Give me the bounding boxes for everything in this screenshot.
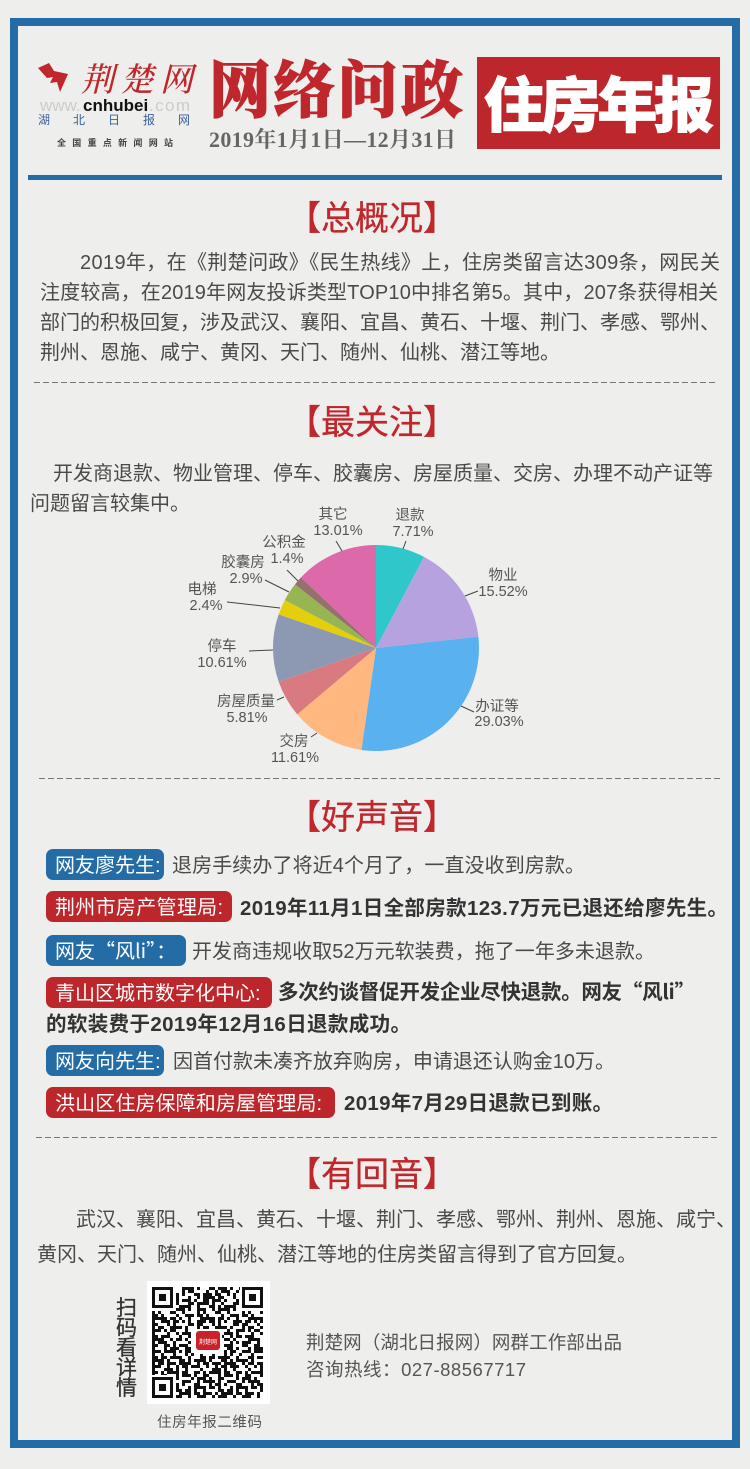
heading: 【总概况】	[287, 200, 457, 238]
pie labels	[188, 505, 528, 766]
text block: 黄冈、天门、随州、仙桃、潜江等地的住房类留言得到了官方回复。	[37, 1243, 637, 1266]
QR caption: 住房年报二维码	[157, 1414, 262, 1431]
pie labels: 2.4%	[189, 598, 223, 614]
text block: 部门的积极回复，涉及武汉、襄阳、宜昌、黄石、十堰、荆门、孝感、鄂州、	[40, 311, 720, 334]
logo newspaper name: 湖北日报网	[38, 112, 190, 127]
logo url: cnhubei	[83, 96, 148, 115]
heading: 【有回音】	[287, 1156, 457, 1194]
exchange 3 question	[46, 1045, 615, 1076]
exchange 1 reply	[46, 891, 728, 922]
pie labels: 29.03%	[474, 714, 524, 730]
text block: 开发商退款、物业管理、停车、胶囊房、房屋质量、交房、办理不动产证等	[53, 462, 713, 485]
pie labels: 1.4%	[270, 551, 304, 567]
heading: 【好声音】	[287, 799, 457, 837]
header rule	[28, 175, 722, 180]
logo url	[39, 96, 190, 115]
exchange 3 question: 网友向先生:	[55, 1050, 161, 1073]
footer credits: 荆楚网（湖北日报网）网群工作部出品	[306, 1332, 622, 1353]
scan prompt: 看	[116, 1337, 137, 1360]
exchange 1 question: 网友廖先生:	[55, 854, 161, 877]
pie labels: 11.61%	[271, 750, 319, 766]
section: overview	[40, 200, 720, 364]
pie labels: 停车	[208, 638, 236, 655]
exchange 2 question	[46, 935, 655, 966]
footer credits	[306, 1332, 622, 1380]
title: 网络问政	[209, 58, 463, 126]
scan prompt: 详	[116, 1357, 137, 1380]
scan prompt	[116, 1297, 137, 1400]
logo: cnhubei	[38, 63, 198, 148]
exchange 2 reply: 多次约谈督促开发企业尽快退款。网友“风li”	[278, 975, 695, 1005]
pie labels: 13.01%	[313, 523, 363, 539]
exchange 2 reply	[46, 975, 695, 1036]
scan prompt: 码	[116, 1317, 137, 1340]
pie labels: 办证等	[475, 697, 519, 715]
badge: annual report: 住房年报	[484, 73, 714, 140]
pie labels: 房屋质量	[217, 693, 275, 710]
footer credits: 咨询热线：027-88567717	[306, 1359, 526, 1380]
pie labels: 退款	[396, 507, 425, 524]
pie labels: 15.52%	[478, 584, 528, 600]
exchange 3 question: 因首付款未凑齐放弃购房，申请退还认购金10万。	[173, 1050, 615, 1073]
pie labels: 交房	[280, 732, 308, 750]
header	[38, 57, 720, 152]
text block: 问题留言较集中。	[30, 492, 190, 515]
pie labels: 物业	[488, 567, 518, 584]
text block	[37, 1208, 736, 1266]
pie labels: 电梯	[188, 581, 216, 598]
exchange 1 reply: 荆州市房产管理局:	[55, 896, 223, 919]
icon: logo mark	[38, 63, 68, 92]
pie labels: 7.71%	[392, 524, 434, 540]
badge: annual report	[477, 57, 720, 149]
scan prompt: 情	[116, 1377, 137, 1400]
text block	[30, 462, 713, 515]
exchange 1 question	[46, 849, 585, 880]
exchange 3 reply	[46, 1087, 613, 1118]
exchange 2 question: 网友“风li”：	[55, 935, 176, 964]
logo slogan: 全国重点新闻网站	[57, 137, 173, 148]
text block: 武汉、襄阳、宜昌、黄石、十堰、荆门、孝感、鄂州、荆州、恩施、咸宁、	[76, 1208, 736, 1231]
pie labels: 公积金	[262, 534, 306, 551]
exchange 1 question: 退房手续办了将近4个月了，一直没收到房款。	[172, 854, 585, 877]
leader lines	[227, 541, 478, 737]
pie labels: 10.61%	[197, 655, 247, 671]
scan prompt: 扫	[116, 1297, 137, 1320]
logo name: 荆楚网	[81, 63, 198, 99]
logo url: www.	[39, 96, 81, 115]
exchange 2 reply: 青山区城市数字化中心:	[55, 982, 261, 1005]
logo url: .com	[149, 96, 190, 115]
exchange 2 question: 开发商违规收取52万元软装费，拖了一年多未退款。	[192, 940, 655, 963]
QR code	[147, 1281, 270, 1404]
text block: 荆州、恩施、咸宁、黄冈、天门、随州、仙桃、潜江等地。	[40, 341, 560, 364]
pie labels: 其它	[318, 505, 348, 523]
pie labels: 胶囊房	[221, 554, 265, 571]
exchange 1 reply: 2019年11月1日全部房款123.7万元已退还给廖先生。	[240, 896, 728, 920]
exchange 3 reply: 2019年7月29日退款已到账。	[344, 1092, 613, 1115]
section: good voices	[46, 799, 728, 1118]
date: 2019年1月1日—12月31日	[209, 127, 456, 152]
text block: 2019年，在《荆楚问政》《民生热线》上，住房类留言达309条，网民关	[80, 251, 720, 274]
exchange 2 reply: 的软装费于2019年12月16日退款成功。	[46, 1012, 411, 1036]
exchange 3 reply: 洪山区住房保障和房屋管理局:	[55, 1092, 322, 1115]
text block	[40, 251, 720, 364]
section: most watched	[30, 404, 713, 766]
text block: 注度较高，在2019年网友投诉类型TOP10中排名第5。其中，207条获得相关	[40, 281, 718, 304]
heading: 【最关注】	[287, 404, 457, 442]
pie chart	[188, 505, 528, 766]
section: responses	[37, 1156, 736, 1266]
pie labels: 5.81%	[226, 710, 268, 726]
pie labels: 2.9%	[229, 571, 263, 587]
QR code: 荆楚网	[199, 1338, 217, 1346]
